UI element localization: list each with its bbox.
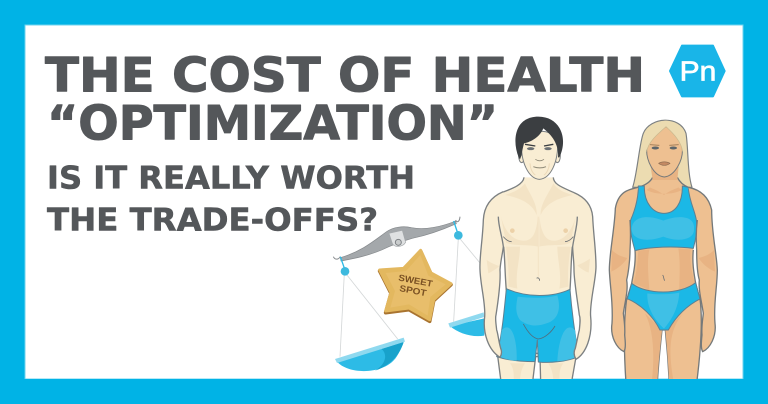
woman arm shading <box>611 250 715 272</box>
man left arm <box>480 192 503 357</box>
subtitle: IS IT REALLY WORTH <box>47 160 415 196</box>
man figure <box>480 117 596 382</box>
man torso <box>498 177 577 303</box>
beam <box>333 217 460 261</box>
icon: Pn logo <box>670 46 725 96</box>
woman torso <box>628 177 698 303</box>
man muscle shading <box>501 183 576 289</box>
title <box>45 48 645 152</box>
woman top <box>630 186 697 251</box>
subtitle: THE TRADE-OFFS? <box>47 202 378 238</box>
right pan <box>448 312 484 336</box>
woman torso outline <box>627 177 700 300</box>
subtitle <box>47 160 415 238</box>
icon: Pn logo: Pn <box>680 55 716 86</box>
woman shading <box>633 187 695 290</box>
title: THE COST OF HEALTH <box>45 48 645 104</box>
star <box>380 250 451 321</box>
woman legs <box>624 299 701 383</box>
woman head <box>646 121 684 180</box>
man arm shading <box>487 259 590 273</box>
title: “OPTIMIZATION” <box>47 96 498 152</box>
woman hair <box>633 120 692 187</box>
woman right arm <box>688 187 717 352</box>
bottom border band <box>0 379 768 404</box>
star: SWEET <box>398 272 434 289</box>
woman figure <box>609 120 717 383</box>
man head <box>515 117 563 179</box>
star: SPOT <box>399 283 428 298</box>
strings <box>340 238 482 357</box>
woman left arm <box>609 187 638 352</box>
man torso outline <box>503 177 574 290</box>
hooks <box>340 257 345 270</box>
left pan <box>335 338 405 371</box>
man legs <box>497 353 577 382</box>
woman briefs <box>627 283 700 330</box>
man shorts <box>497 289 579 362</box>
man right arm <box>573 193 596 359</box>
icon: balance scale with sweet spot star <box>333 217 484 371</box>
